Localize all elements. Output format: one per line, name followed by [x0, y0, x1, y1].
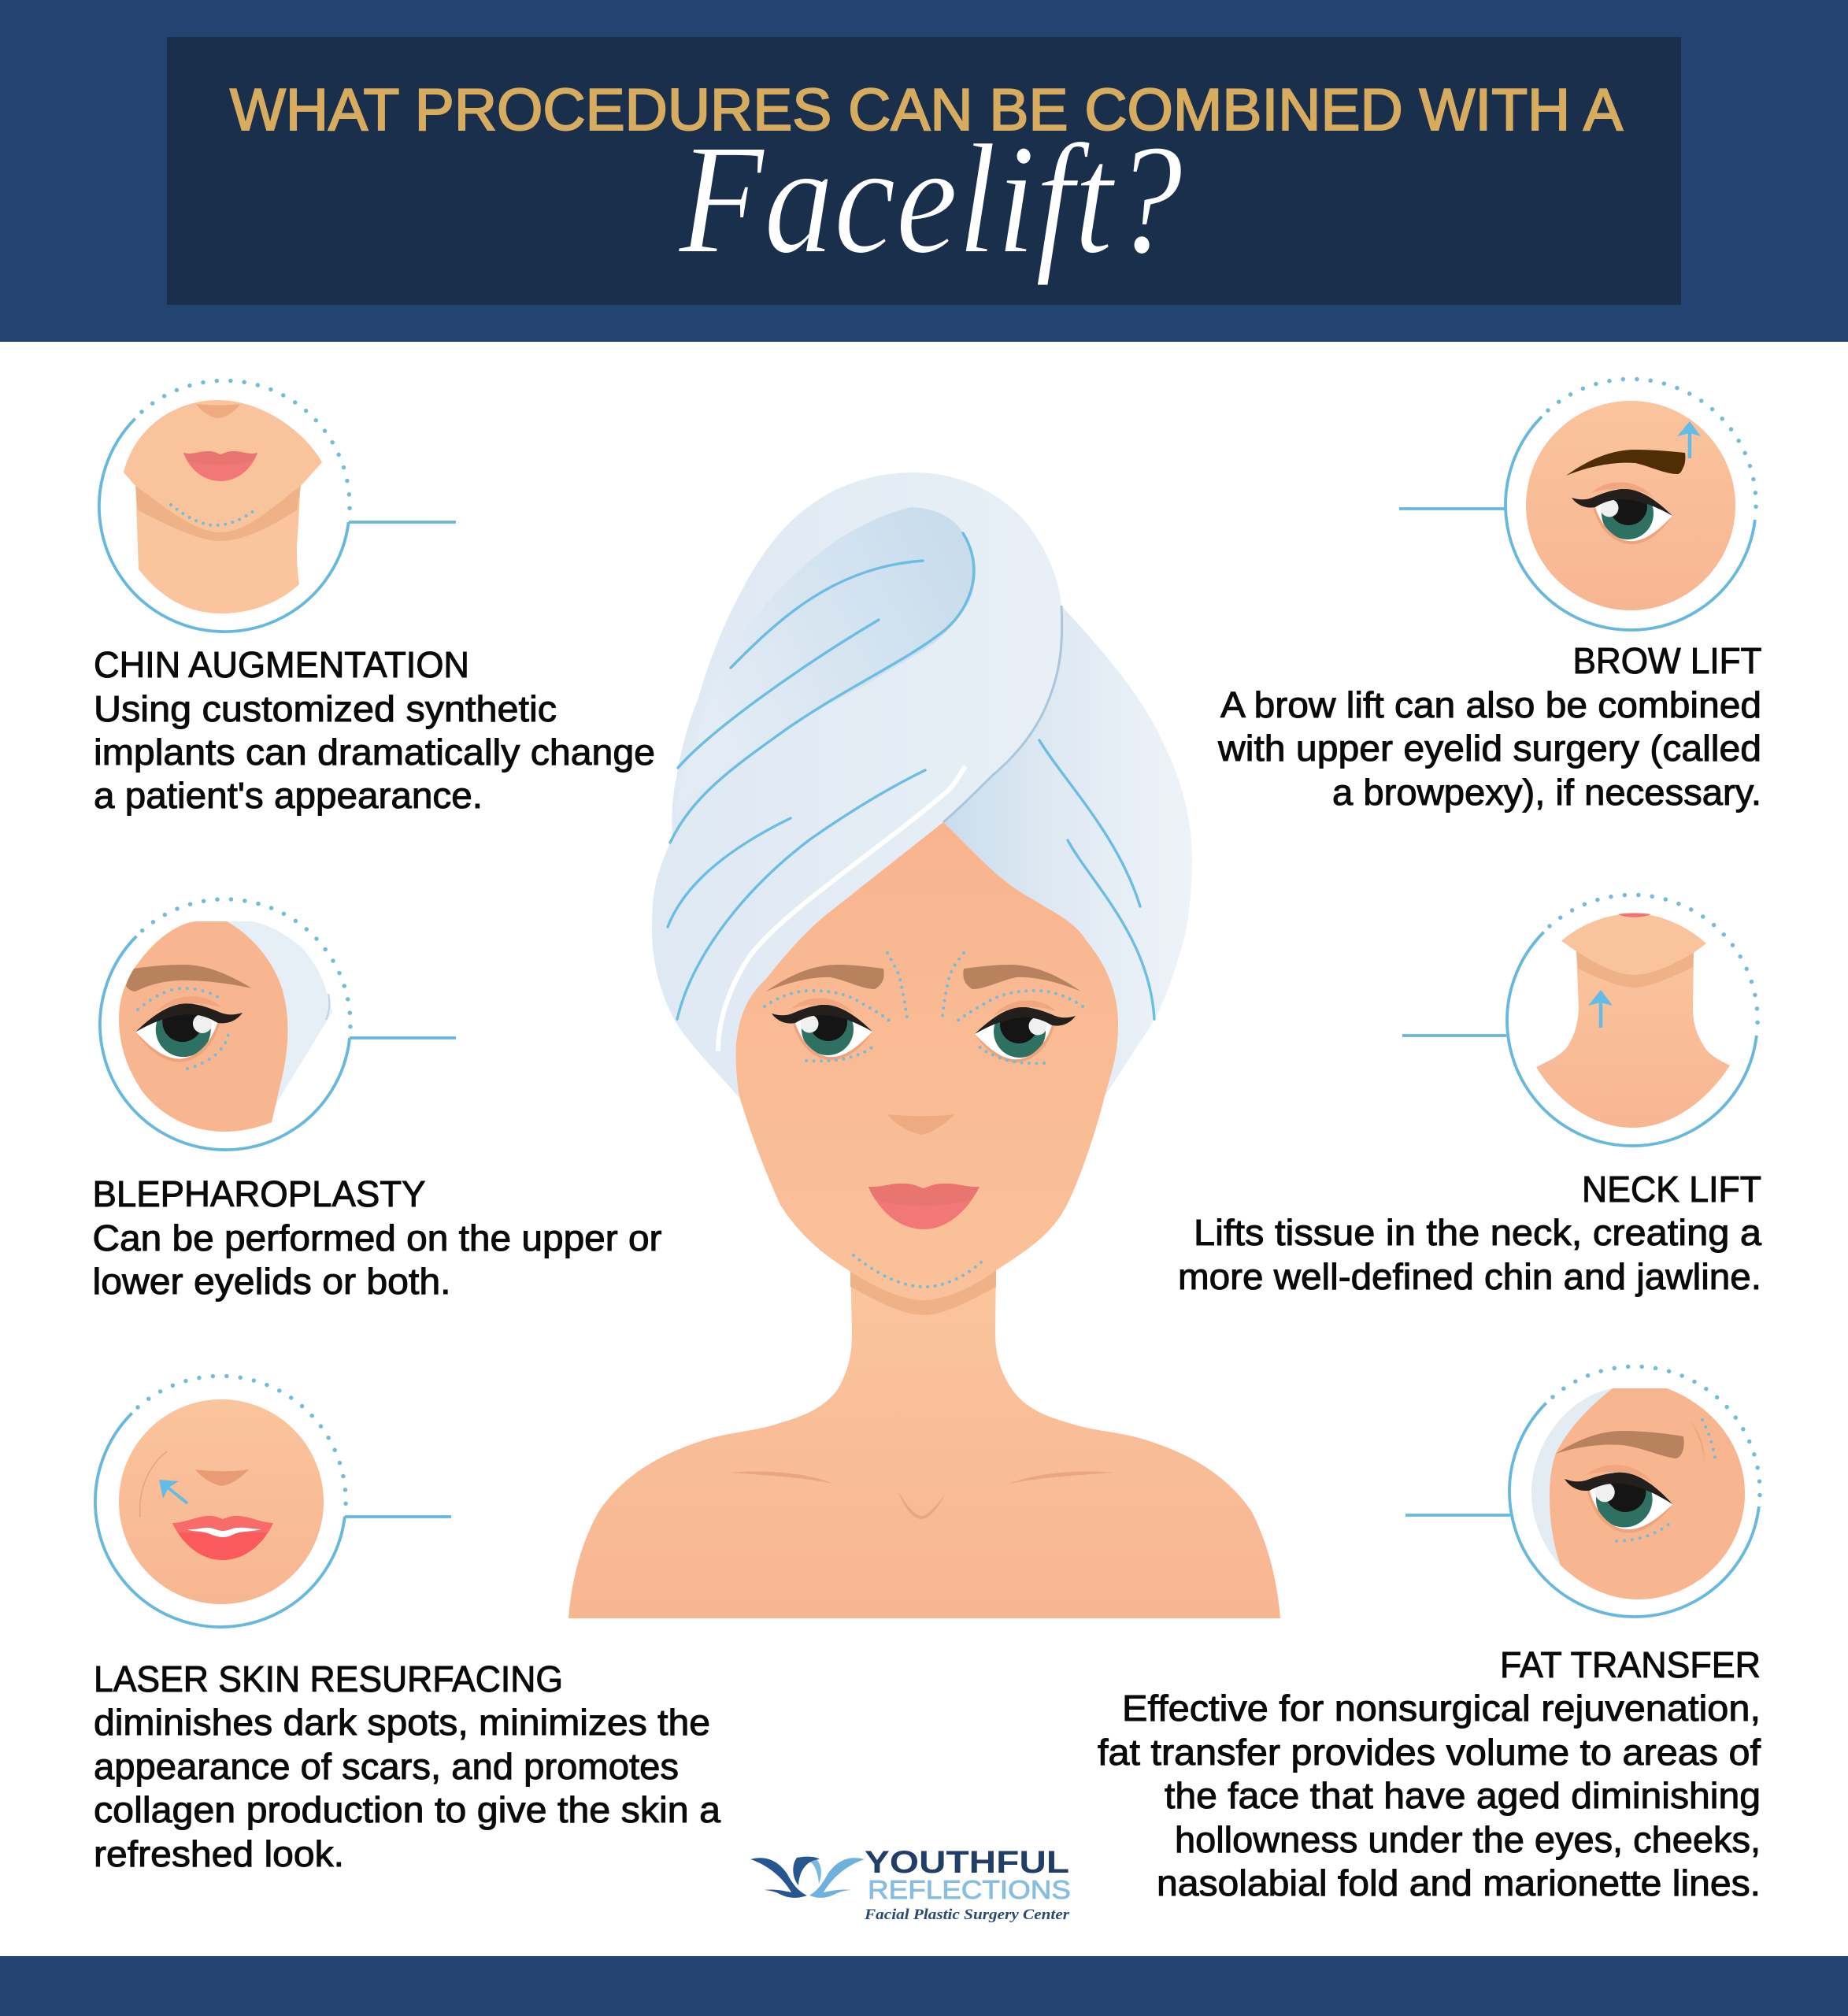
- text: laser skin resurfacing: diminishes dark spots, minimizes the: [94, 1702, 710, 1743]
- lips: [183, 451, 257, 481]
- header band: [0, 0, 1848, 342]
- connector: [1405, 1514, 1510, 1517]
- skin circle: [1526, 401, 1735, 610]
- teeth: [187, 1528, 261, 1537]
- collarbones: [730, 1472, 1114, 1519]
- text: blepharoplasty: [93, 1173, 661, 1302]
- text: chin augmentation: implants can dramatically change: [94, 732, 655, 773]
- text: laser skin resurfacing: refreshed look.: [94, 1833, 344, 1874]
- icon: neck lift: [1402, 895, 1757, 1146]
- text: neck lift: more well-defined chin and jawline.: [1178, 1256, 1761, 1297]
- nose: [195, 1469, 249, 1486]
- eyebrow: [1556, 1431, 1684, 1458]
- text: fat transfer: the face that have aged diminishing: [1165, 1775, 1761, 1816]
- central illustration: woman with towel: [568, 472, 1280, 1618]
- icon: laser skin resurfacing: [95, 1376, 451, 1627]
- lips sliver: [1618, 914, 1651, 917]
- text: blepharoplasty: BLEPHAROPLASTY: [93, 1173, 425, 1214]
- jaw: [1561, 914, 1706, 975]
- arrow: [159, 1480, 187, 1503]
- dotted line: [171, 505, 257, 525]
- title: first line: WHAT PROCEDURES CAN BE COMBINED WITH A: [230, 76, 1623, 143]
- text: brow lift: BROW LIFT: [1573, 640, 1762, 681]
- eyebrows: [766, 965, 1081, 991]
- chin shadow: [135, 486, 301, 541]
- ring: [1509, 1403, 1759, 1617]
- towel: [1531, 1388, 1613, 1566]
- logo wordmark: YOUTHFUL: [865, 1845, 1069, 1880]
- text: brow lift: A brow lift can also be combined: [1220, 684, 1761, 725]
- lips: [868, 1184, 980, 1229]
- chin shadow: [850, 1268, 996, 1315]
- ring: [1505, 417, 1755, 630]
- text: fat transfer: [1098, 1644, 1761, 1903]
- connector: [1402, 1034, 1506, 1037]
- ring: [1507, 932, 1757, 1146]
- arrow: [1677, 421, 1701, 458]
- logo: REFLECTIONS: [868, 1875, 1071, 1904]
- towel fold: [676, 507, 976, 818]
- towel back lobe: [943, 606, 1192, 1181]
- skin: [119, 921, 287, 1132]
- dotted lines: [1617, 1420, 1716, 1541]
- connector: [350, 1036, 456, 1040]
- treatment dotted lines: [765, 953, 1083, 1287]
- arrow: [1588, 990, 1613, 1028]
- neck: [135, 480, 301, 613]
- logo tagline: Facial Plastic Surgery Center: [864, 1907, 1070, 1923]
- icon: brow lift: [1399, 379, 1756, 630]
- nose: [196, 404, 240, 418]
- text: fat transfer: Effective for nonsurgical rejuvenation,: [1122, 1688, 1761, 1729]
- text: brow lift: a browpexy), if necessary.: [1332, 772, 1761, 813]
- eye: [1562, 1462, 1675, 1535]
- ring: [95, 1413, 345, 1627]
- text: laser skin resurfacing: appearance of scars, and promotes: [94, 1746, 679, 1787]
- towel crease lines: [668, 533, 1154, 1019]
- fold line: [140, 1451, 167, 1518]
- text: laser skin resurfacing: [94, 1658, 720, 1874]
- towel crease: [326, 994, 329, 1020]
- face: [736, 822, 1118, 1300]
- logo: [750, 1845, 1071, 1923]
- text: fat transfer: fat transfer provides volume to areas of: [1098, 1732, 1761, 1773]
- text: fat transfer: FAT TRANSFER: [1500, 1644, 1761, 1685]
- skin circle: [119, 1399, 324, 1604]
- towel highlight: [718, 766, 965, 1051]
- dotted lines: [138, 988, 228, 1069]
- text: neck lift: [1178, 1169, 1761, 1297]
- text: fat transfer: nasolabial fold and marionette lines.: [1157, 1862, 1761, 1903]
- skin: [1550, 1388, 1745, 1599]
- title panel: [167, 37, 1681, 305]
- text: neck lift: NECK LIFT: [1582, 1169, 1761, 1210]
- text: blepharoplasty: lower eyelids or both.: [93, 1261, 450, 1302]
- ring: [100, 936, 350, 1150]
- text: laser skin resurfacing: LASER SKIN RESURFACING: [94, 1658, 563, 1699]
- icon: chin augmentation: [99, 380, 456, 632]
- text: chin augmentation: [94, 644, 655, 816]
- text: brow lift: [1217, 640, 1762, 813]
- text: chin augmentation: Using customized synthetic: [94, 688, 557, 729]
- footer band: [0, 1956, 1848, 2016]
- text: chin augmentation: CHIN AUGMENTATION: [94, 644, 469, 685]
- connector: [1399, 507, 1505, 510]
- logo mark: [750, 1857, 865, 1898]
- towel front wrap: [652, 472, 1062, 1099]
- title: script line: Facelift?: [677, 113, 1183, 287]
- text: laser skin resurfacing: collagen production to give the skin a: [94, 1789, 720, 1830]
- face: [124, 400, 322, 532]
- nose: [887, 1114, 954, 1135]
- text: blepharoplasty: Can be performed on the upper or: [93, 1217, 661, 1258]
- wrinkle: [1691, 1420, 1705, 1462]
- eyes: [772, 998, 1076, 1062]
- text: brow lift: with upper eyelid surgery (called: [1217, 728, 1761, 769]
- eye: [1572, 482, 1672, 544]
- connector: [345, 1515, 451, 1518]
- neck and shoulders: [568, 1260, 1280, 1618]
- eyebrow: [1566, 450, 1685, 476]
- text: fat transfer: hollowness under the eyes, cheeks,: [1175, 1819, 1761, 1860]
- lips: [172, 1516, 273, 1560]
- icon: blepharoplasty: [100, 899, 456, 1150]
- connector: [349, 521, 456, 524]
- eye: [135, 996, 243, 1062]
- towel: [227, 921, 332, 1114]
- towel edge shadow: [943, 606, 1062, 822]
- chin shadow: [1576, 951, 1694, 988]
- text: neck lift: Lifts tissue in the neck, creating a: [1194, 1212, 1761, 1253]
- eyebrow: [126, 965, 252, 991]
- text: chin augmentation: a patient's appearance.: [94, 775, 483, 816]
- neck: [1536, 951, 1730, 1128]
- icon: fat transfer: [1405, 1366, 1760, 1617]
- ring: [99, 419, 349, 632]
